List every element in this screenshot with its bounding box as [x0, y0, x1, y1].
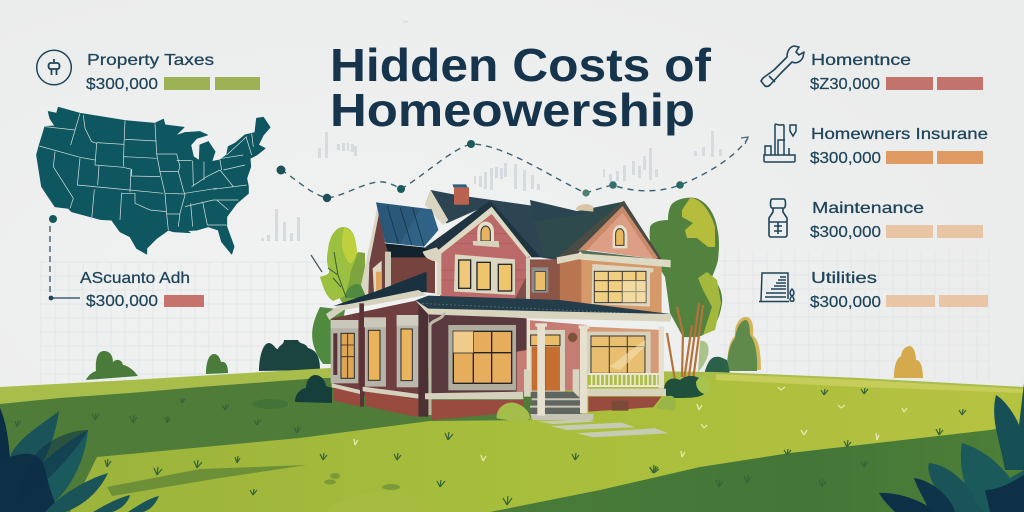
mid section wall: [530, 259, 560, 310]
map of the United States: [37, 107, 270, 254]
columns: [527, 320, 664, 416]
homewners insurane item: Homewners Insurane: [811, 126, 988, 143]
title: [330, 39, 712, 136]
porch wreath: [568, 333, 577, 342]
property taxes item: [86, 52, 260, 93]
gutter: [430, 313, 444, 415]
icon: utilities chart: [759, 273, 794, 302]
house: [326, 184, 676, 437]
utilities item: [810, 270, 988, 311]
left wing small window: [373, 261, 382, 293]
center triple window: [454, 254, 515, 295]
leaves bottom right: [879, 383, 1024, 512]
left wing gable trim: [361, 207, 380, 295]
bay window three: [397, 315, 418, 387]
background grid right: [720, 250, 990, 380]
background bushes: [86, 317, 923, 388]
main dark roof: [425, 190, 633, 260]
grass tufts dark: [15, 388, 966, 505]
ascuanto item: [80, 270, 204, 310]
utilities item: $300,000: [810, 294, 881, 311]
icon: bottle: [769, 199, 787, 237]
icon: coin: [37, 50, 71, 85]
basement vent: [612, 401, 628, 411]
ascuanto item: AScuanto Adh: [80, 270, 190, 287]
property taxes item: Property Taxes: [87, 52, 214, 69]
porch right window: [587, 332, 651, 375]
title: Homeowership: [330, 84, 695, 136]
brick foundation: [333, 387, 662, 420]
bay window one: [331, 320, 358, 383]
maintenance item: $300,000: [810, 224, 881, 241]
chimney: [453, 184, 469, 205]
right arched window: [613, 225, 627, 248]
center gable: [423, 201, 541, 302]
right porch wall: [587, 327, 662, 374]
homentnce item: $Z30,000: [810, 76, 880, 93]
lower wall: [326, 290, 428, 417]
right large window: [592, 264, 653, 307]
grass tufts light: [354, 387, 907, 461]
maintenance item: [810, 200, 983, 241]
porch railing: [587, 374, 666, 396]
bush left of house: [295, 375, 332, 403]
homentnce item: Homentnce: [811, 52, 911, 69]
center wall: [428, 310, 527, 397]
steps: [524, 369, 593, 420]
lower left roof: [333, 272, 427, 306]
faint bar charts: [261, 21, 722, 241]
right wing wall: [557, 201, 671, 315]
under roof shadow: [385, 243, 435, 259]
icon: insurance: [764, 124, 796, 162]
trend line with nodes: [276, 137, 748, 202]
leaves bottom left: [0, 408, 159, 512]
walkway: [537, 419, 668, 437]
left wing wall: [391, 257, 435, 293]
left tree: [311, 227, 367, 364]
maintenance item: Maintenance: [812, 200, 924, 217]
porch roof: [415, 296, 671, 322]
left wing gable wall: [362, 207, 391, 296]
door wall: [517, 320, 587, 392]
icon: wrench: [761, 46, 804, 86]
homewners insurane item: [810, 126, 988, 167]
callout connector: [49, 215, 80, 300]
background grid left: [40, 262, 330, 385]
shrubs at porch: [497, 396, 676, 421]
homentnce item: [810, 52, 983, 93]
small center window: [532, 267, 548, 293]
utilities item: Utilities: [811, 270, 877, 287]
lawn: [0, 368, 1024, 512]
title: Hidden Costs of: [330, 39, 712, 91]
entry door: [527, 330, 565, 392]
chimney right vent: [576, 204, 593, 212]
bay window two: [364, 317, 386, 387]
big front window: [448, 325, 516, 390]
foundation trim: [332, 383, 523, 399]
right tree: [650, 198, 722, 398]
ascuanto item: $300,000: [86, 293, 158, 310]
blue metal roof: [376, 202, 438, 247]
property taxes item: $300,000: [86, 76, 158, 93]
arched window center: [473, 222, 499, 247]
homewners insurane item: $300,000: [810, 150, 881, 167]
